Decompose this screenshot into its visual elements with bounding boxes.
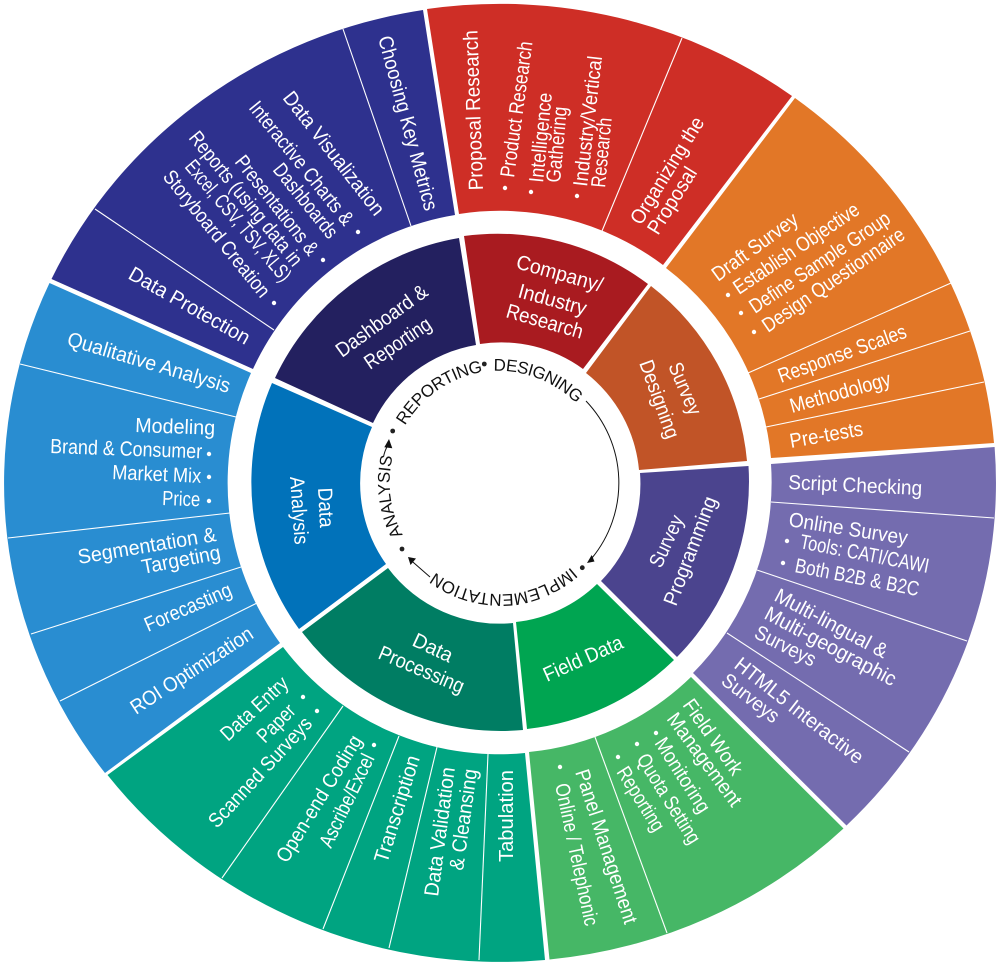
text: online survey list: Online Survey bbox=[787, 508, 910, 550]
text: modeling list: Market Mix bbox=[112, 461, 202, 488]
text: data visualization list: Reports (using data in bbox=[184, 127, 307, 271]
center: process cycle bbox=[378, 359, 620, 606]
text: data entry list: Data Entry bbox=[216, 671, 294, 746]
text: field work management list: Quota Setting bbox=[632, 749, 705, 848]
text: data visualization list: Interactive Charts & bbox=[244, 97, 358, 230]
text: choosing key metrics: Choosing Key Metrics bbox=[373, 33, 442, 213]
text: script checking: Script Checking bbox=[788, 471, 923, 500]
inner segment: company / industry research bbox=[464, 234, 648, 369]
inner segment: data analysis: Data bbox=[313, 487, 338, 529]
inner segment: dashboard and reporting: Dashboard & bbox=[331, 280, 433, 362]
text: segmentation and targeting: Segmentation & bbox=[76, 523, 218, 569]
text: html5 surveys: Surveys bbox=[717, 669, 784, 728]
text: draft survey list bbox=[707, 198, 909, 337]
text: online survey list: Tools: CATI/CAWI bbox=[798, 530, 931, 578]
label: reporting: REPORTING bbox=[396, 361, 482, 424]
panel: script checking (outer purple) bbox=[693, 447, 996, 826]
inner segment: survey programming: Programming bbox=[659, 493, 722, 609]
inner segment: survey programming bbox=[601, 466, 749, 657]
text: data visualization list: Presentations & bbox=[230, 151, 323, 260]
text: data visualization list: Excel, CSV, TSV, XLS) bbox=[180, 155, 296, 286]
text: data visualization list: Dashboards bbox=[268, 159, 343, 243]
text: response scales: Response Scales bbox=[775, 320, 910, 388]
text: data visualization list bbox=[158, 87, 389, 305]
inner segment: survey designing: Designing bbox=[634, 357, 684, 442]
text: modeling list: Modeling bbox=[135, 414, 216, 440]
text: field work management list: Monitoring bbox=[650, 733, 715, 817]
panel: draft survey (outer orange) bbox=[666, 98, 994, 458]
text: panel management list bbox=[550, 765, 642, 928]
text: modeling list: Price bbox=[162, 487, 201, 511]
text: data entry list: Paper bbox=[252, 699, 300, 748]
text: field work management list: Field Work bbox=[678, 695, 748, 780]
bullets bbox=[390, 362, 585, 570]
inner segment: survey programming: Survey bbox=[645, 511, 689, 571]
text: multi-lingual surveys: Surveys bbox=[751, 621, 820, 671]
text: draft survey list: Design Questionnaire bbox=[758, 223, 909, 337]
text: open-end coding list: Ascribe/Excel bbox=[315, 750, 379, 851]
inner segment: data analysis: Analysis bbox=[285, 476, 313, 545]
text: transcription: Transcription bbox=[370, 753, 425, 865]
text: data visualization list: Storyboard Creation bbox=[158, 166, 275, 302]
text: data entry list: Scanned Surveys bbox=[204, 712, 317, 832]
arrow: designing to implementation bbox=[586, 401, 619, 563]
panel: data entry (outer teal) bbox=[108, 647, 545, 962]
text: organizing the proposal: Proposal bbox=[643, 163, 702, 239]
inner segment: survey designing bbox=[586, 286, 747, 470]
text: modeling list bbox=[50, 414, 216, 511]
text: proposal research bbox=[459, 30, 617, 198]
text: methodology: Methodology bbox=[787, 368, 894, 418]
text: pre-tests: Pre-tests bbox=[788, 417, 865, 453]
text: proposal research: Gathering bbox=[542, 106, 572, 183]
text: proposal research: Product Research bbox=[496, 40, 538, 179]
inner segment: company / industry research: Company/ bbox=[514, 251, 606, 297]
arrow: analysis to reporting bbox=[384, 439, 392, 457]
inner segment: data processing: Data bbox=[409, 629, 457, 668]
inner segment: dashboard and reporting: Reporting bbox=[360, 313, 436, 374]
text: roi optimization: ROI Optimization bbox=[126, 622, 258, 719]
text: draft survey list: Draft Survey bbox=[707, 208, 803, 286]
inner segment: dashboard and reporting bbox=[275, 238, 476, 423]
panel: field work (outer green) bbox=[529, 677, 844, 960]
text: data validation: & Cleansing bbox=[445, 767, 482, 872]
panel: analysis (outer blue) bbox=[4, 283, 280, 773]
text: qualitative analysis: Qualitative Analysis bbox=[65, 328, 233, 398]
text: online survey list: Both B2B & B2C bbox=[793, 554, 921, 601]
text: forecasting: Forecasting bbox=[141, 578, 235, 637]
text: organizing the proposal: Organizing the bbox=[626, 113, 709, 229]
text: multi-lingual surveys: Multi-geographic bbox=[761, 602, 900, 691]
text: proposal research: Industry/Vertical bbox=[569, 55, 607, 188]
arrow: implementation to analysis bbox=[408, 557, 430, 577]
label: analysis: ANALYSIS bbox=[378, 456, 403, 536]
text: data visualization list: Data Visualization bbox=[278, 87, 389, 220]
text: field work management list bbox=[612, 695, 748, 848]
text: tabulation: Tabulation bbox=[495, 770, 518, 862]
panel: data visualization (outer navy) bbox=[52, 10, 455, 369]
text: proposal research: Proposal Research bbox=[459, 30, 488, 191]
inner segment: data processing: Processing bbox=[375, 641, 468, 698]
label: designing: DESIGNING bbox=[494, 359, 582, 402]
text: data validation bbox=[420, 766, 482, 898]
text: field work management list: Management bbox=[662, 708, 747, 811]
text: open-end coding list: Open-end Coding bbox=[272, 731, 367, 867]
text: multi-lingual surveys: Multi-lingual & bbox=[771, 584, 892, 663]
text: html5 surveys: HTML5 Interactive bbox=[730, 653, 868, 769]
panel: proposal research (outer red) bbox=[427, 4, 792, 265]
inner segment: company / industry research: Research bbox=[504, 300, 586, 344]
label: implementation: IMPLEMENTATION bbox=[430, 568, 578, 606]
text: panel management list: Online / Telephonic bbox=[550, 781, 603, 928]
text: draft survey list: Define Sample Group bbox=[745, 207, 895, 318]
text: modeling list: Brand & Consumer bbox=[50, 435, 203, 463]
inner segment: survey designing: Survey bbox=[663, 359, 706, 419]
text: field work management list: Reporting bbox=[612, 762, 669, 836]
text: panel management list: Panel Management bbox=[570, 766, 642, 927]
text: data validation: Data Validation bbox=[420, 766, 460, 898]
text: data protection: Data Protection bbox=[125, 262, 254, 350]
text: segmentation and targeting: Targeting bbox=[140, 541, 223, 579]
inner segment: data processing bbox=[302, 568, 523, 731]
text: online survey list bbox=[781, 508, 931, 601]
inner segment: company / industry research: Industry bbox=[516, 280, 590, 320]
text: proposal research: Research bbox=[587, 117, 617, 188]
inner segment: data analysis bbox=[251, 383, 386, 629]
text: proposal research: Intelligence bbox=[525, 92, 557, 183]
text: draft survey list: Establish Objective bbox=[729, 198, 864, 299]
inner segment: field data: Field Data bbox=[540, 631, 627, 687]
inner segment: field data bbox=[516, 584, 674, 729]
